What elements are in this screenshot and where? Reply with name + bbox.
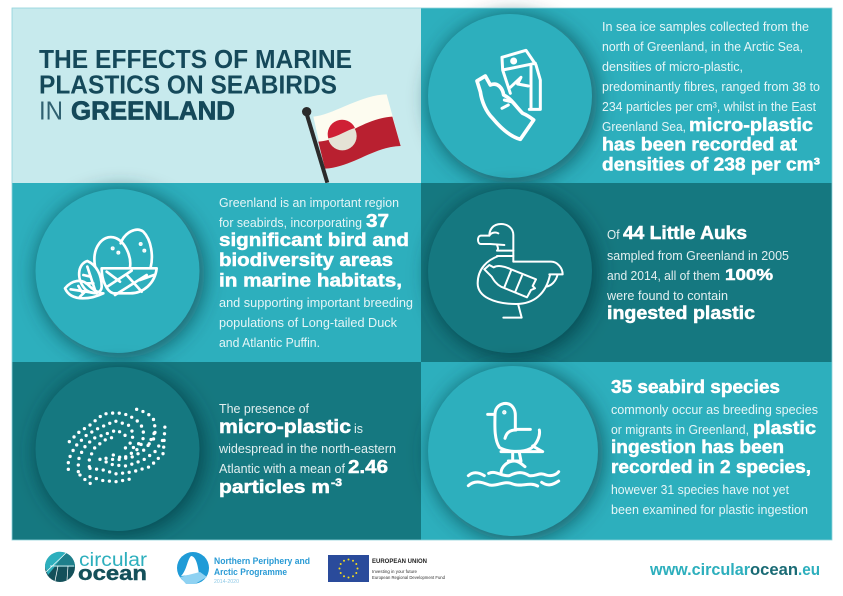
text: important region for seabirds: biodiversity areas xyxy=(219,249,393,270)
text: seabird species: plastic xyxy=(753,417,816,438)
icon: carton and bottle xyxy=(477,50,540,139)
text: important region for seabirds: and supporting important breeding xyxy=(219,296,413,310)
title: THE EFFECTS OF MARINE xyxy=(39,46,352,74)
text: widespread micro-plastic: widespread in the north-eastern xyxy=(218,442,396,456)
text: seabird species: been examined for plastic ingestion xyxy=(611,503,808,517)
text: seabird species: however 31 species have not yet xyxy=(611,483,790,497)
text: seabird species: commonly occur as breeding species xyxy=(611,403,818,417)
text: sea ice densities: Greenland Sea, xyxy=(602,120,686,134)
text: little auks xyxy=(606,222,789,323)
text: little auks: 100% xyxy=(725,267,773,284)
text: little auks: and 2014, all of them xyxy=(607,269,720,283)
text: widespread micro-plastic: 2.46 xyxy=(348,456,388,477)
text: important region for seabirds xyxy=(219,196,413,350)
logo: Northern Periphery and Arctic Programme: 2014-2020 xyxy=(214,579,239,585)
title: IN xyxy=(39,98,63,126)
text: important region for seabirds: and Atlantic Puffin. xyxy=(219,336,320,350)
text: little auks: ingested plastic xyxy=(607,302,755,323)
text: important region for seabirds: populations of Long-tailed Duck xyxy=(219,316,398,330)
text: important region for seabirds: 37 xyxy=(366,210,389,231)
website url: ocean xyxy=(750,560,798,579)
panel: significant bird areas xyxy=(12,183,421,362)
logo: Northern Periphery and Arctic Programme: Northern Periphery and xyxy=(214,556,310,566)
title xyxy=(39,46,352,126)
title: PLASTICS ON SEABIRDS xyxy=(39,72,337,100)
logo: Circular Ocean: ocean xyxy=(78,563,147,585)
icon: Greenland flag xyxy=(302,94,401,183)
text: widespread micro-plastic: micro-plastic xyxy=(219,416,351,438)
text: seabird species: 35 seabird species xyxy=(611,376,780,397)
text: widespread micro-plastic xyxy=(218,402,396,497)
text: important region for seabirds: in marine habitats, xyxy=(219,270,402,290)
text: little auks: Of xyxy=(607,228,620,242)
text: sea ice densities: predominantly fibres, ranged from 38 to xyxy=(602,80,820,94)
website url: .eu xyxy=(798,560,820,579)
text: important region for seabirds: for seabirds, incorporating xyxy=(219,216,362,230)
logo: European Union: EUROPEAN UNION xyxy=(372,559,427,565)
text: widespread micro-plastic: Atlantic with a mean of xyxy=(219,462,346,476)
text: widespread micro-plastic: -3 xyxy=(331,477,342,489)
text: sea ice densities xyxy=(602,20,820,174)
text: sea ice densities: micro-plastic xyxy=(689,114,813,135)
text: sea ice densities: densities of 238 per cm³ xyxy=(602,154,820,174)
text: sea ice densities: densities of micro-plastic, xyxy=(602,60,743,74)
logo: European Union: Investing in your future xyxy=(372,569,417,574)
icon: duck with plastic bottle xyxy=(478,224,563,318)
text: important region for seabirds: significant bird and xyxy=(219,229,409,250)
logo: Circular Ocean: circular xyxy=(79,550,148,571)
panel: little auks xyxy=(421,183,832,362)
text: little auks: sampled from Greenland in 2005 xyxy=(607,249,789,263)
logo: European Union xyxy=(328,555,445,582)
logo: Northern Periphery and Arctic Programme: Arctic Programme xyxy=(214,567,287,577)
text: little auks: 44 Little Auks xyxy=(623,222,747,243)
logo: Northern Periphery and Arctic Programme xyxy=(177,552,310,585)
icon: eggs in nest with leaves xyxy=(65,230,157,298)
text: widespread micro-plastic: particles m xyxy=(219,476,330,497)
text: important region for seabirds: Greenland is an important region xyxy=(219,196,399,210)
panel: widespread micro-plastic xyxy=(12,362,421,540)
logo: Circular Ocean xyxy=(45,550,148,585)
panel: title xyxy=(12,8,421,183)
text: seabird species: or migrants in Greenland, xyxy=(611,423,749,437)
website url xyxy=(649,560,820,579)
text: sea ice densities: In sea ice samples collected from the xyxy=(602,20,809,34)
title: GREENLAND xyxy=(71,98,235,126)
icon: micro-plastic dot spiral xyxy=(68,409,165,485)
text: seabird species: recorded in 2 species, xyxy=(611,456,811,477)
panel: seabird species xyxy=(421,362,832,541)
text: little auks: were found to contain xyxy=(606,289,728,303)
text: sea ice densities: 234 particles per cm³, whilst in the East xyxy=(602,100,817,114)
text: widespread micro-plastic: is xyxy=(354,422,363,436)
icon: seabird on rock in waves xyxy=(468,403,559,486)
website url: www.circular xyxy=(649,560,750,579)
text: sea ice densities: has been recorded at xyxy=(602,134,797,154)
text: seabird species xyxy=(611,376,818,517)
panel: sea ice micro-plastic densities xyxy=(421,8,832,183)
text: sea ice densities: north of Greenland, in the Arctic Sea, xyxy=(602,40,803,54)
text: seabird species: ingestion has been xyxy=(611,436,784,457)
text: widespread micro-plastic: The presence of xyxy=(219,402,310,416)
logo: European Union: European Regional Development Fund xyxy=(372,575,445,580)
